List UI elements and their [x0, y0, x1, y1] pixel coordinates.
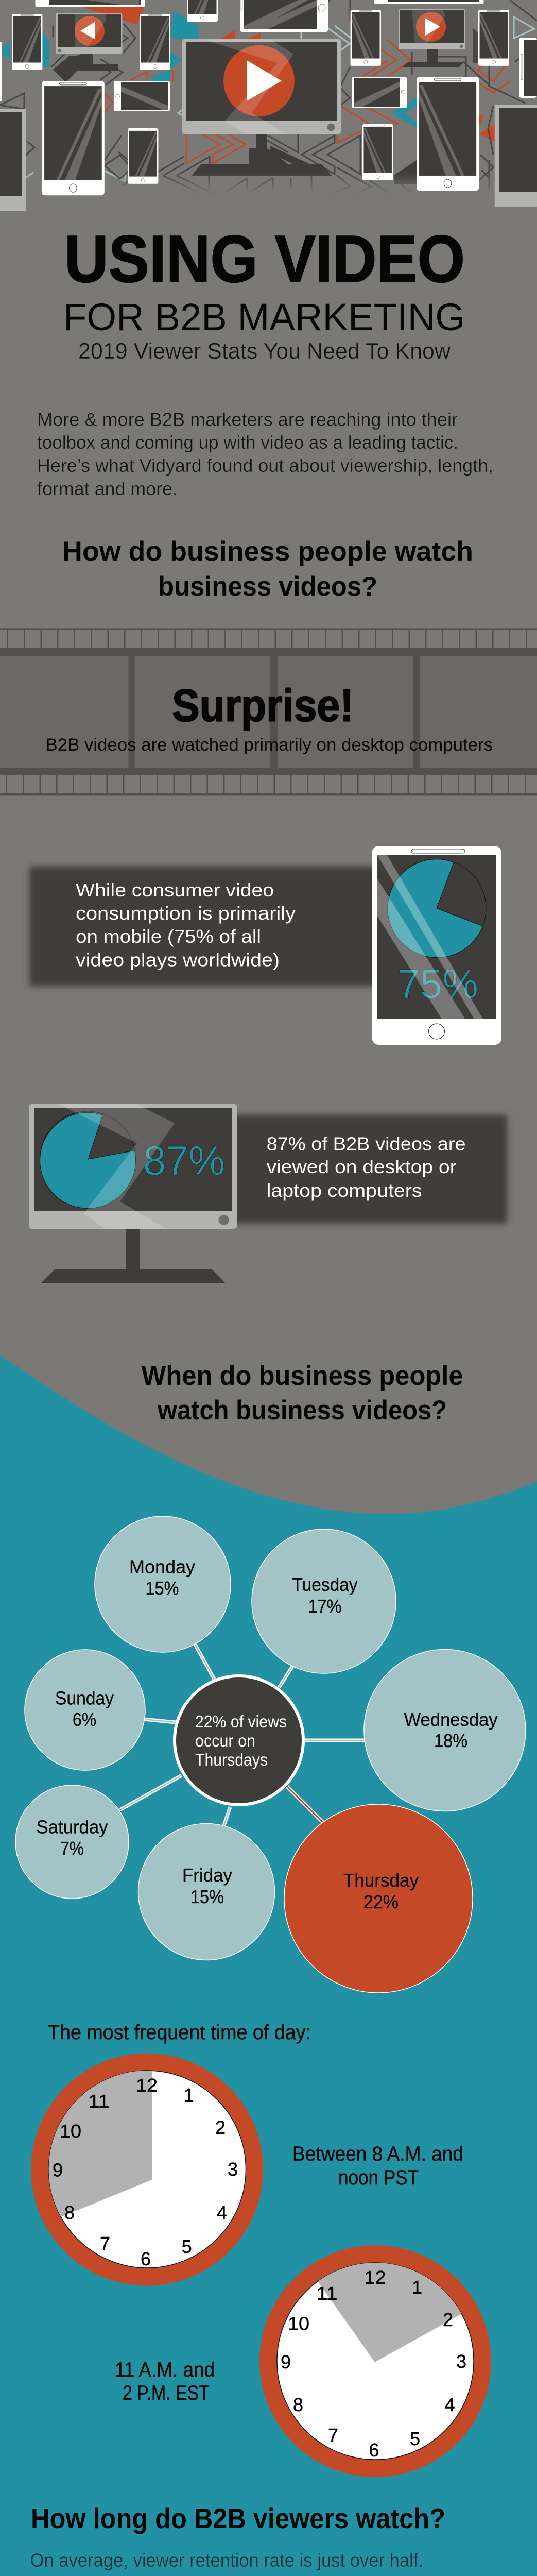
banner heading: Surprise!: [172, 680, 354, 731]
callout text: 87% of B2B videos are: [267, 1133, 466, 1155]
clock: 11 a.m. to 2 p.m.: 6: [369, 2439, 379, 2461]
bubble: Thursday highlighted: Thursday: [343, 1870, 419, 1891]
device: phone 4: [128, 128, 158, 184]
small left monitor stand: [53, 54, 118, 82]
clock: 11 a.m. to 2 p.m.: [259, 2245, 494, 2477]
clock: 11 a.m. to 2 p.m.: 10: [288, 2313, 309, 2334]
device: tablet landscape right: [352, 77, 407, 108]
clock: 8 a.m. to noon: [31, 2054, 263, 2285]
clock: 8 a.m. to noon: 1: [184, 2084, 194, 2106]
callout text: viewed on desktop or: [267, 1156, 457, 1177]
intro paragraph: format and more.: [37, 478, 178, 499]
callout text: While consumer video: [76, 879, 274, 901]
clock: 11 a.m. to 2 p.m.: 11: [316, 2283, 338, 2304]
clock: 8 a.m. to noon: 9: [53, 2160, 63, 2180]
bubble: Tuesday: Tuesday: [292, 1574, 357, 1595]
bubble: Sunday: [25, 1650, 145, 1770]
clock: 11 a.m. to 2 p.m.: 2: [443, 2309, 453, 2330]
device: tablet landscape left: [114, 81, 170, 111]
clock: 11 a.m. to 2 p.m.: 5: [410, 2428, 420, 2449]
bubble: Sunday: 6%: [73, 1709, 96, 1730]
clock: 11 a.m. to 2 p.m.: 12: [365, 2267, 386, 2288]
heading: when: When do business people: [141, 1361, 463, 1391]
text box: [229, 1115, 507, 1224]
centre bubble: Thursdays: [195, 1750, 268, 1769]
device: partial tablet at left edge: [0, 42, 2, 101]
panel: B2B desktop stat: [29, 1104, 507, 1283]
bubble: Monday: Monday: [129, 1556, 195, 1578]
panel: film strip banner: [0, 629, 537, 795]
clock: 11 a.m. to 2 p.m.: 4: [445, 2394, 455, 2415]
title: USING VIDEO: [64, 222, 465, 296]
header fade: [0, 173, 537, 195]
icon: phone with 75% pie: 75%: [397, 961, 478, 1007]
clock: 8 a.m. to noon: 5: [182, 2236, 192, 2257]
bubble: Friday: 15%: [190, 1886, 224, 1907]
device: phone cut off at top: [187, 0, 218, 22]
bubble: Monday: 15%: [145, 1578, 179, 1599]
label: EST window: 2 P.M. EST: [123, 2382, 210, 2404]
tagline: 2019 Viewer Stats You Need To Know: [78, 338, 451, 364]
subtitle: FOR B2B MARKETING: [63, 296, 465, 338]
label: PST window: [292, 2143, 463, 2189]
label: EST window: 11 A.M. and: [115, 2359, 215, 2381]
connector lines: [120, 1645, 365, 1827]
main monitor stand: [192, 134, 332, 176]
text box: [29, 867, 379, 986]
icon: phone with 75% pie: [372, 846, 501, 1045]
device: large tablet at top centre: [240, 0, 328, 32]
intro paragraph: More & more B2B marketers are reaching into their: [37, 409, 458, 430]
device: large phone left: [42, 81, 105, 195]
bubble: Wednesday: [364, 1650, 526, 1811]
intro paragraph: Here’s what Vidyard found out about viewership, length,: [37, 455, 493, 476]
bubble: Sunday: Sunday: [55, 1688, 114, 1709]
heading: when: watch business videos?: [157, 1395, 447, 1426]
bubble: Tuesday: [252, 1529, 396, 1673]
clock: 8 a.m. to noon: 11: [89, 2091, 109, 2112]
device: phones: [12, 14, 42, 70]
main monitor with play button: [182, 39, 341, 134]
retention note: On average, viewer retention rate is just over half.: [30, 2550, 423, 2571]
clock: 11 a.m. to 2 p.m.: 1: [412, 2277, 422, 2298]
clock: 8 a.m. to noon: 7: [100, 2233, 110, 2254]
clock: 8 a.m. to noon: 12: [136, 2075, 158, 2096]
heading: how: business videos?: [158, 571, 377, 602]
bubble: Saturday: [15, 1785, 129, 1899]
intro paragraph: [37, 409, 493, 499]
callout text: laptop computers: [267, 1180, 422, 1201]
label: PST window: Between 8 A.M. and: [292, 2143, 463, 2165]
small monitor right with play icon: [399, 9, 465, 49]
clock: 11 a.m. to 2 p.m.: 7: [328, 2425, 338, 2446]
small monitor left with rewind icon: [56, 13, 123, 54]
device: monitor cropped right: [495, 105, 537, 207]
device: phone 7: [362, 124, 393, 180]
heading: how: [62, 536, 473, 602]
panel: consumer mobile stat: [29, 846, 501, 1045]
clock: 11 a.m. to 2 p.m.: 3: [456, 2351, 466, 2372]
device: phone 2: [140, 14, 170, 70]
device: tablet cut off at top right: [374, 0, 484, 4]
bubble: Wednesday: Wednesday: [404, 1709, 498, 1730]
heading: when: [141, 1361, 463, 1426]
bubble: Friday: Friday: [182, 1865, 232, 1886]
callout text: video plays worldwide): [76, 949, 280, 971]
callout text: [267, 1133, 466, 1201]
clock: 8 a.m. to noon: 3: [228, 2159, 238, 2180]
device: phone 5: [351, 10, 381, 66]
chart: day of week bubbles: [15, 1516, 526, 1993]
header illustration: devices playing video: [0, 0, 537, 211]
bubble: Thursday highlighted: 22%: [363, 1891, 399, 1912]
clock: 8 a.m. to noon: 8: [64, 2202, 75, 2223]
label: EST window: [115, 2359, 215, 2404]
clock: 11 a.m. to 2 p.m.: 9: [281, 2351, 291, 2372]
teal lower section background: [0, 1355, 537, 2576]
label: PST window: noon PST: [338, 2166, 419, 2189]
clock: 8 a.m. to noon: 6: [141, 2248, 151, 2269]
callout text: [76, 879, 296, 971]
device: tablet at right edge: [519, 38, 537, 98]
device: large phone right: [417, 77, 479, 191]
clock: 8 a.m. to noon: 4: [217, 2202, 227, 2223]
heading: how long: How long do B2B viewers watch?: [31, 2502, 445, 2534]
clock: 11 a.m. to 2 p.m.: 8: [293, 2394, 303, 2415]
bubble: Thursday highlighted: [284, 1804, 473, 1993]
bubble: Tuesday: 17%: [308, 1596, 342, 1617]
banner subheading: B2B videos are watched primarily on desktop computers: [45, 735, 493, 755]
clock: 8 a.m. to noon: 10: [60, 2121, 81, 2142]
device: monitor cropped left: [0, 109, 26, 211]
centre bubble: [175, 1676, 303, 1805]
callout text: consumption is primarily: [76, 903, 296, 924]
heading: time of day: The most frequent time of day:: [48, 2021, 311, 2044]
background chevron pattern: [0, 0, 537, 195]
intro paragraph: toolbox and coming up with video as a leading tactic.: [37, 432, 458, 453]
icon: monitor with 87% pie: 87%: [143, 1138, 225, 1183]
heading: how: How do business people watch: [62, 536, 473, 567]
device: phone 6: [478, 10, 509, 66]
callout text: on mobile (75% of all: [76, 926, 261, 947]
bubble: Friday: [138, 1824, 275, 1960]
bubble: Saturday: 7%: [60, 1838, 84, 1859]
bubble: Saturday: Saturday: [36, 1817, 108, 1838]
centre bubble: occur on: [195, 1731, 255, 1750]
device: tablet cut off at top left: [35, 0, 145, 7]
small right monitor stand: [403, 49, 463, 67]
bubble: Monday: [95, 1516, 231, 1652]
bubble: Wednesday: 18%: [434, 1730, 467, 1751]
icon: monitor with 87% pie: [29, 1104, 237, 1283]
clock: 8 a.m. to noon: 2: [215, 2117, 226, 2138]
centre bubble: 22% of views: [195, 1712, 287, 1731]
